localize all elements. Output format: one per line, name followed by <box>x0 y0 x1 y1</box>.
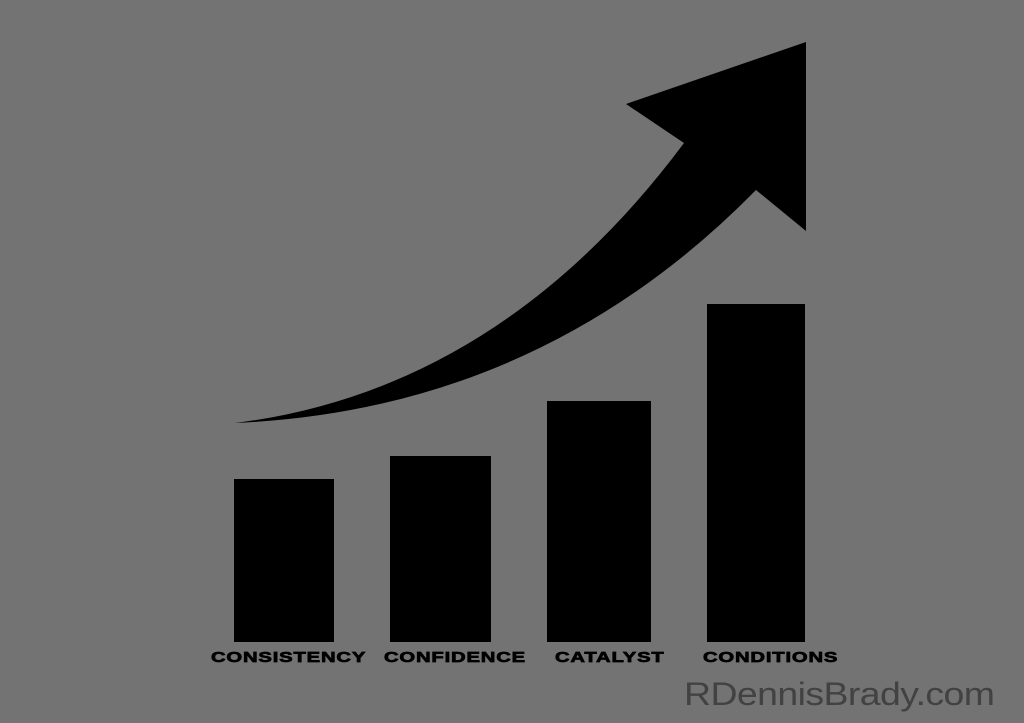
bar: confidence <box>390 456 491 642</box>
bar: catalyst <box>547 401 651 642</box>
label: confidence: CONFIDENCE <box>384 649 526 666</box>
bar: consistency <box>234 479 334 642</box>
bar: conditions <box>707 304 805 642</box>
label: catalyst: CATALYST <box>555 649 665 666</box>
label: conditions: CONDITIONS <box>703 649 838 666</box>
label: consistency: CONSISTENCY <box>211 649 366 666</box>
watermark: RDennisBrady.com <box>684 676 994 712</box>
